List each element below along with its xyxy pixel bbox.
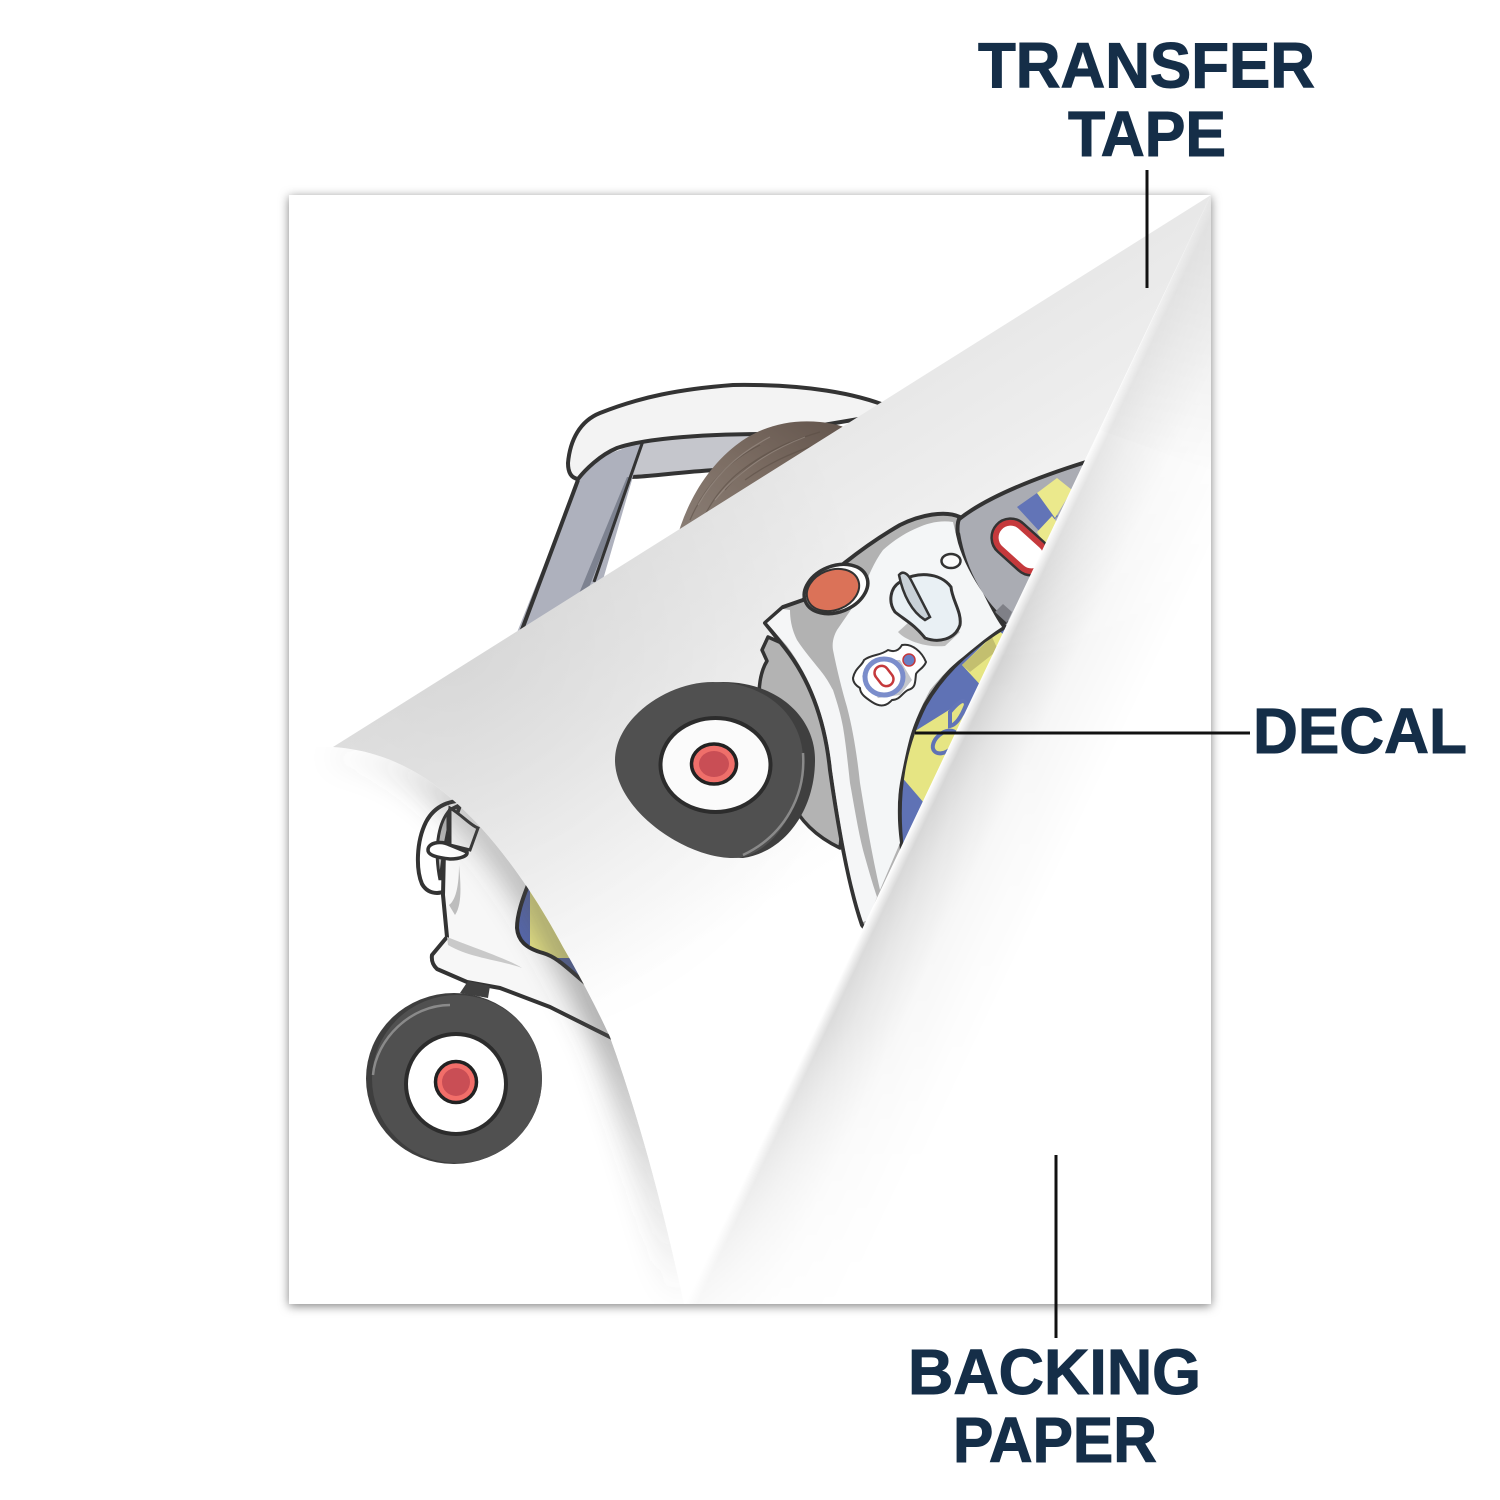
flap tip shading (333, 195, 1211, 1304)
front wheel (366, 993, 542, 1164)
livery under the body arc (902, 630, 1004, 843)
label: transfer tape: TAPE (1068, 98, 1226, 170)
shadow cast by the peeled tape (376, 757, 674, 1263)
label: transfer tape (978, 30, 1315, 170)
front window with livery (515, 885, 584, 986)
mirror and front fender (416, 800, 611, 1040)
infographic: layers of a peeled decal sheet (282, 42, 1466, 1462)
decal mirrored on the back of the tape (615, 460, 1090, 935)
fold shading (684, 195, 1211, 1304)
red oblong light (989, 516, 1053, 578)
label: transfer tape: TRANSFER (978, 30, 1315, 102)
backing paper sheet (289, 195, 1211, 1304)
top corner shading (1100, 195, 1211, 470)
leader line: decal (915, 732, 1250, 734)
transfer tape peeled flap (333, 195, 1211, 1304)
label: backing paper: BACKING (908, 1336, 1201, 1408)
label: backing paper: PAPER (953, 1404, 1157, 1476)
small round cap (942, 554, 960, 568)
label: decal: DECAL (1253, 695, 1467, 767)
orange push button (797, 555, 875, 623)
canopy struts (518, 436, 750, 631)
label: backing paper (908, 1336, 1201, 1476)
driver hair (680, 421, 843, 529)
rear wheel (615, 682, 815, 858)
front wheel stem (460, 981, 490, 998)
police crest sticker (853, 645, 926, 706)
leader line: backing paper (1054, 1155, 1058, 1338)
white dash panel (833, 521, 1002, 890)
gray rear panel (958, 460, 1088, 640)
white fender strip (767, 609, 877, 922)
rear fender behind the wheel (759, 637, 850, 848)
ignition knob (891, 573, 960, 646)
car body base with gray trim (765, 514, 1005, 935)
leader line: transfer tape (1146, 170, 1148, 288)
decal on backing paper: exposed car parts (333, 385, 900, 1304)
canopy roof (568, 385, 900, 479)
checker livery (1017, 493, 1058, 532)
backing paper fold triangle (684, 195, 1211, 1304)
